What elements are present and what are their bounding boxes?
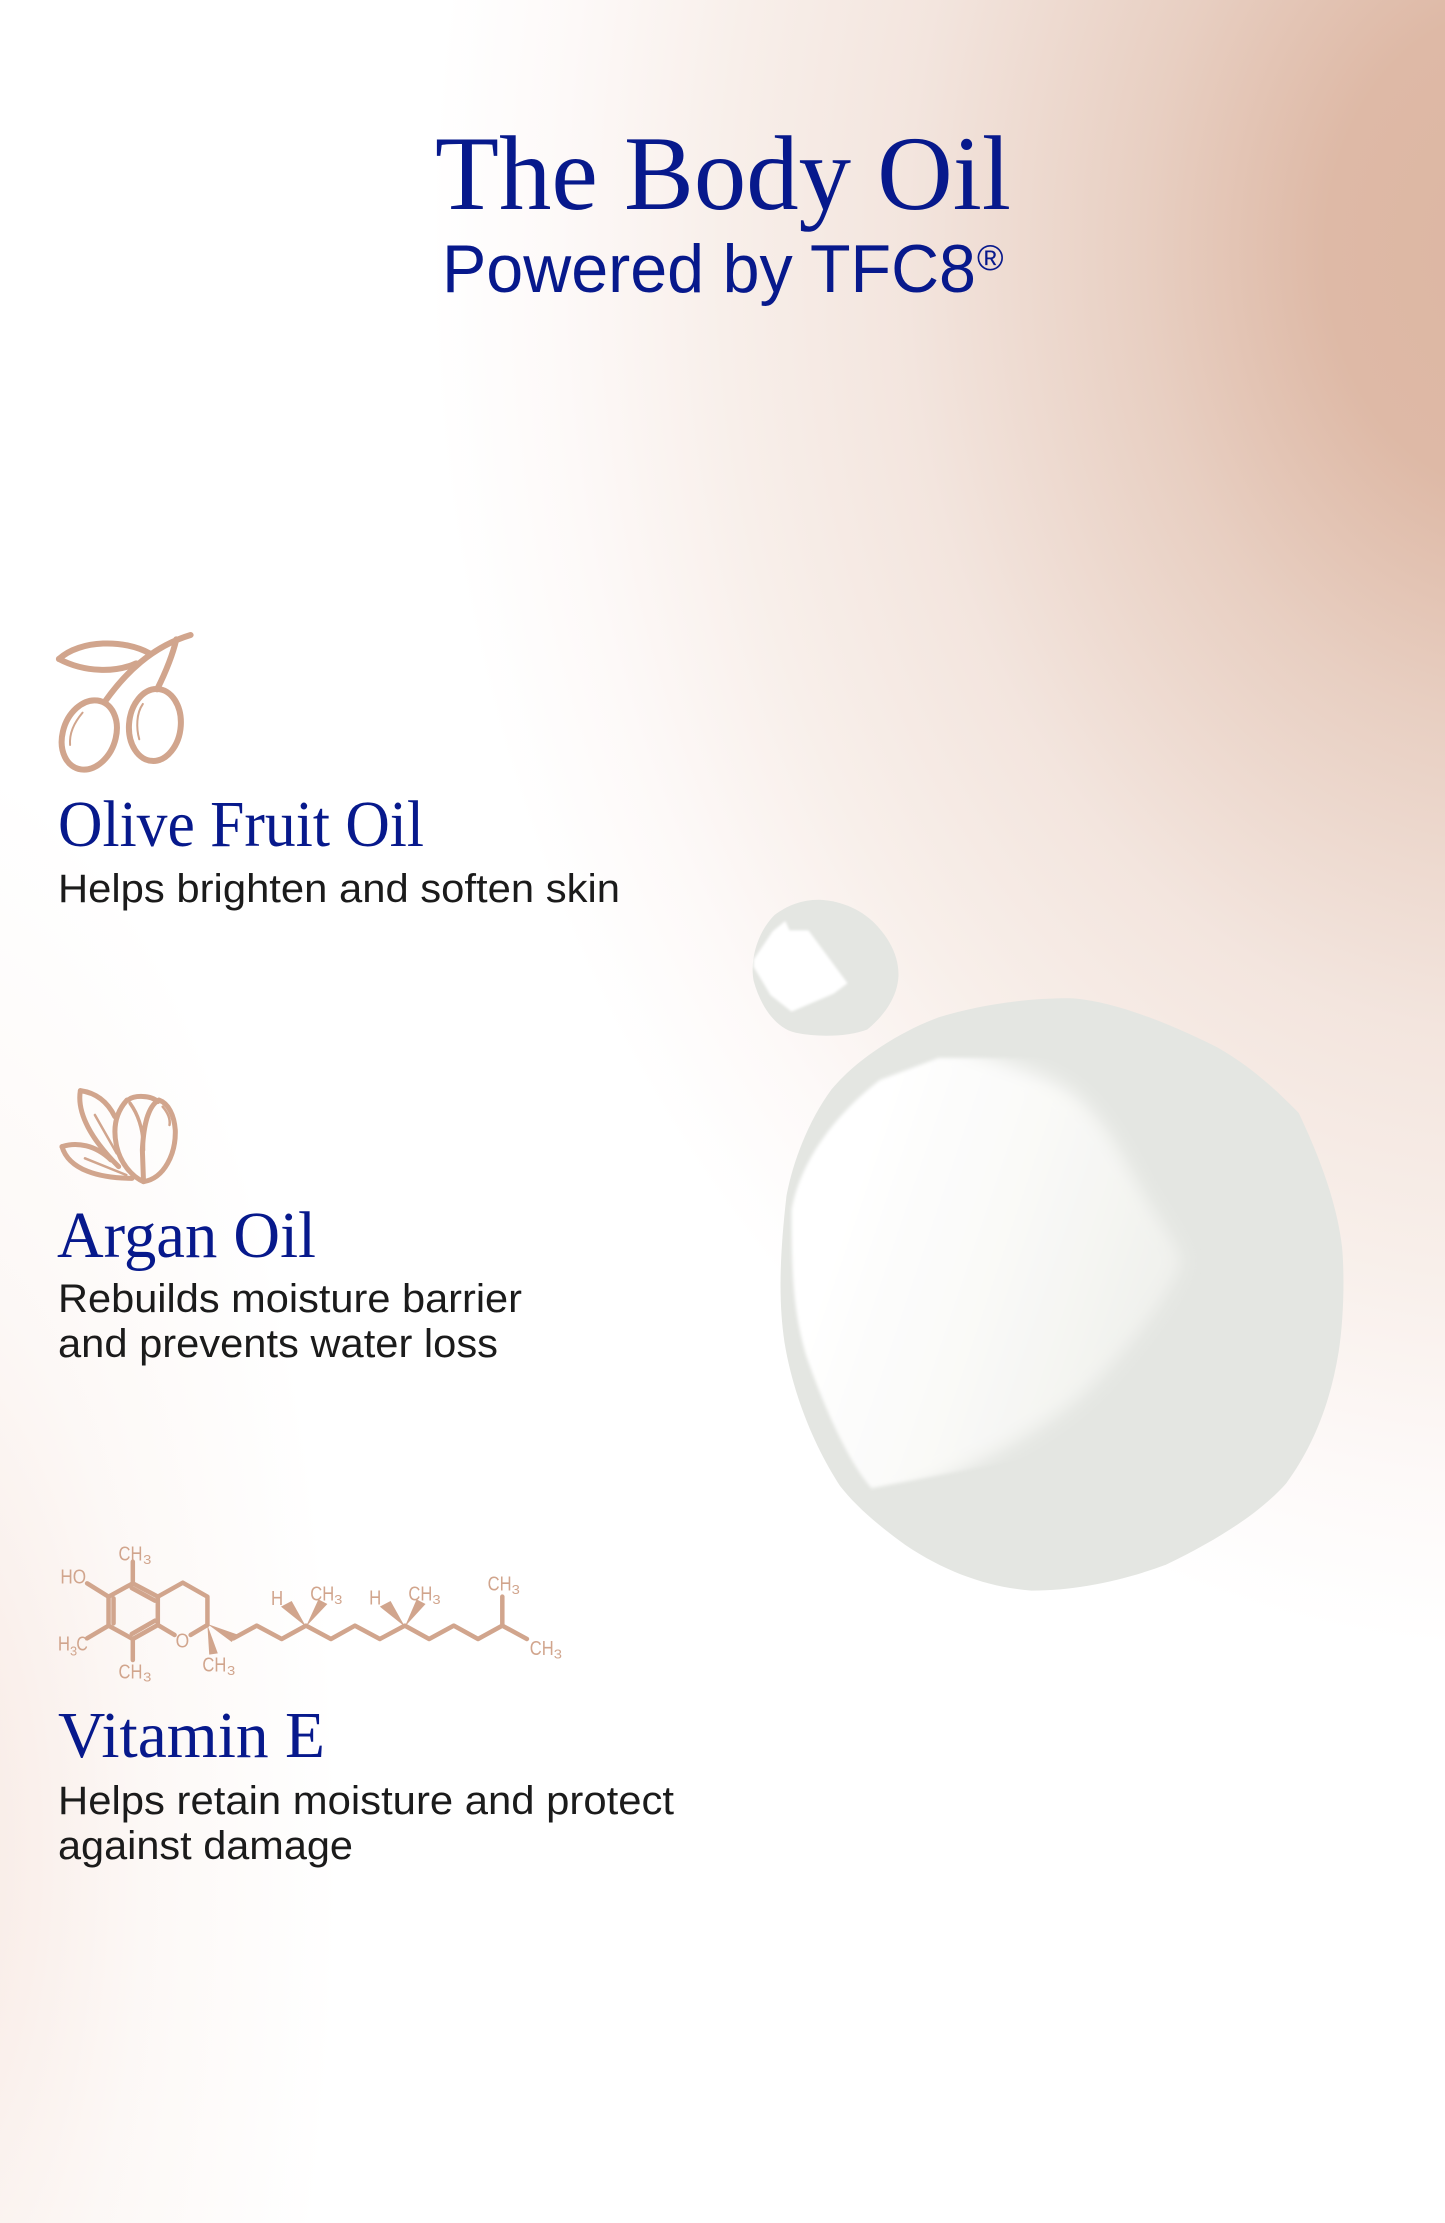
molecule labels: CH <box>119 1661 142 1683</box>
molecule labels: H <box>58 1633 70 1655</box>
molecule labels: CH <box>202 1654 226 1676</box>
molecule labels: CH <box>408 1583 432 1605</box>
molecule labels: 3 <box>227 1663 235 1678</box>
text: argan oil description <box>58 1277 522 1366</box>
molecule labels: CH <box>310 1583 334 1605</box>
title: The Body Oil <box>435 115 1011 232</box>
oil droplets <box>753 900 1343 1591</box>
text: vitamin E description <box>58 1779 674 1868</box>
molecule labels: CH <box>530 1638 554 1660</box>
text: argan oil description: and prevents water loss <box>58 1322 498 1366</box>
molecule labels: 3 <box>70 1644 77 1658</box>
molecule labels: CH <box>119 1543 142 1565</box>
text: vitamin E description: against damage <box>58 1824 353 1868</box>
molecule labels <box>58 1543 562 1685</box>
heading: vitamin E: Vitamin E <box>58 1699 325 1772</box>
text: vitamin E description: Helps retain moisture and protect <box>58 1779 674 1823</box>
molecule labels: 3 <box>143 1552 151 1567</box>
molecule labels: 3 <box>334 1592 342 1607</box>
molecule labels: H <box>271 1588 283 1610</box>
heading: argan oil: Argan Oil <box>57 1199 316 1272</box>
molecule labels: HO <box>60 1566 86 1588</box>
molecule labels: 3 <box>432 1592 441 1607</box>
molecule labels: C <box>76 1633 88 1655</box>
text: olive fruit oil description: Helps brighten and soften skin <box>58 867 620 911</box>
icon: vitamin E molecule <box>58 1543 562 1685</box>
large droplet <box>765 998 1343 1591</box>
molecule labels: 3 <box>512 1582 520 1597</box>
molecule labels: 3 <box>143 1670 151 1685</box>
text: argan oil description: Rebuilds moisture barrier <box>58 1277 522 1321</box>
molecule labels: 3 <box>554 1647 562 1661</box>
molecule labels: CH <box>488 1573 512 1595</box>
molecule labels: O <box>176 1630 189 1652</box>
icon: argan nut and leaves <box>62 1091 175 1182</box>
heading: olive fruit oil: Olive Fruit Oil <box>58 788 424 861</box>
small droplet <box>753 900 898 1036</box>
droplet highlight <box>790 1057 1176 1488</box>
molecule labels: H <box>369 1587 381 1609</box>
icon: olives <box>55 635 191 773</box>
subtitle: ® <box>977 237 1004 278</box>
subtitle: Powered by TFC8 <box>442 231 976 307</box>
wedge bonds <box>207 1599 426 1655</box>
